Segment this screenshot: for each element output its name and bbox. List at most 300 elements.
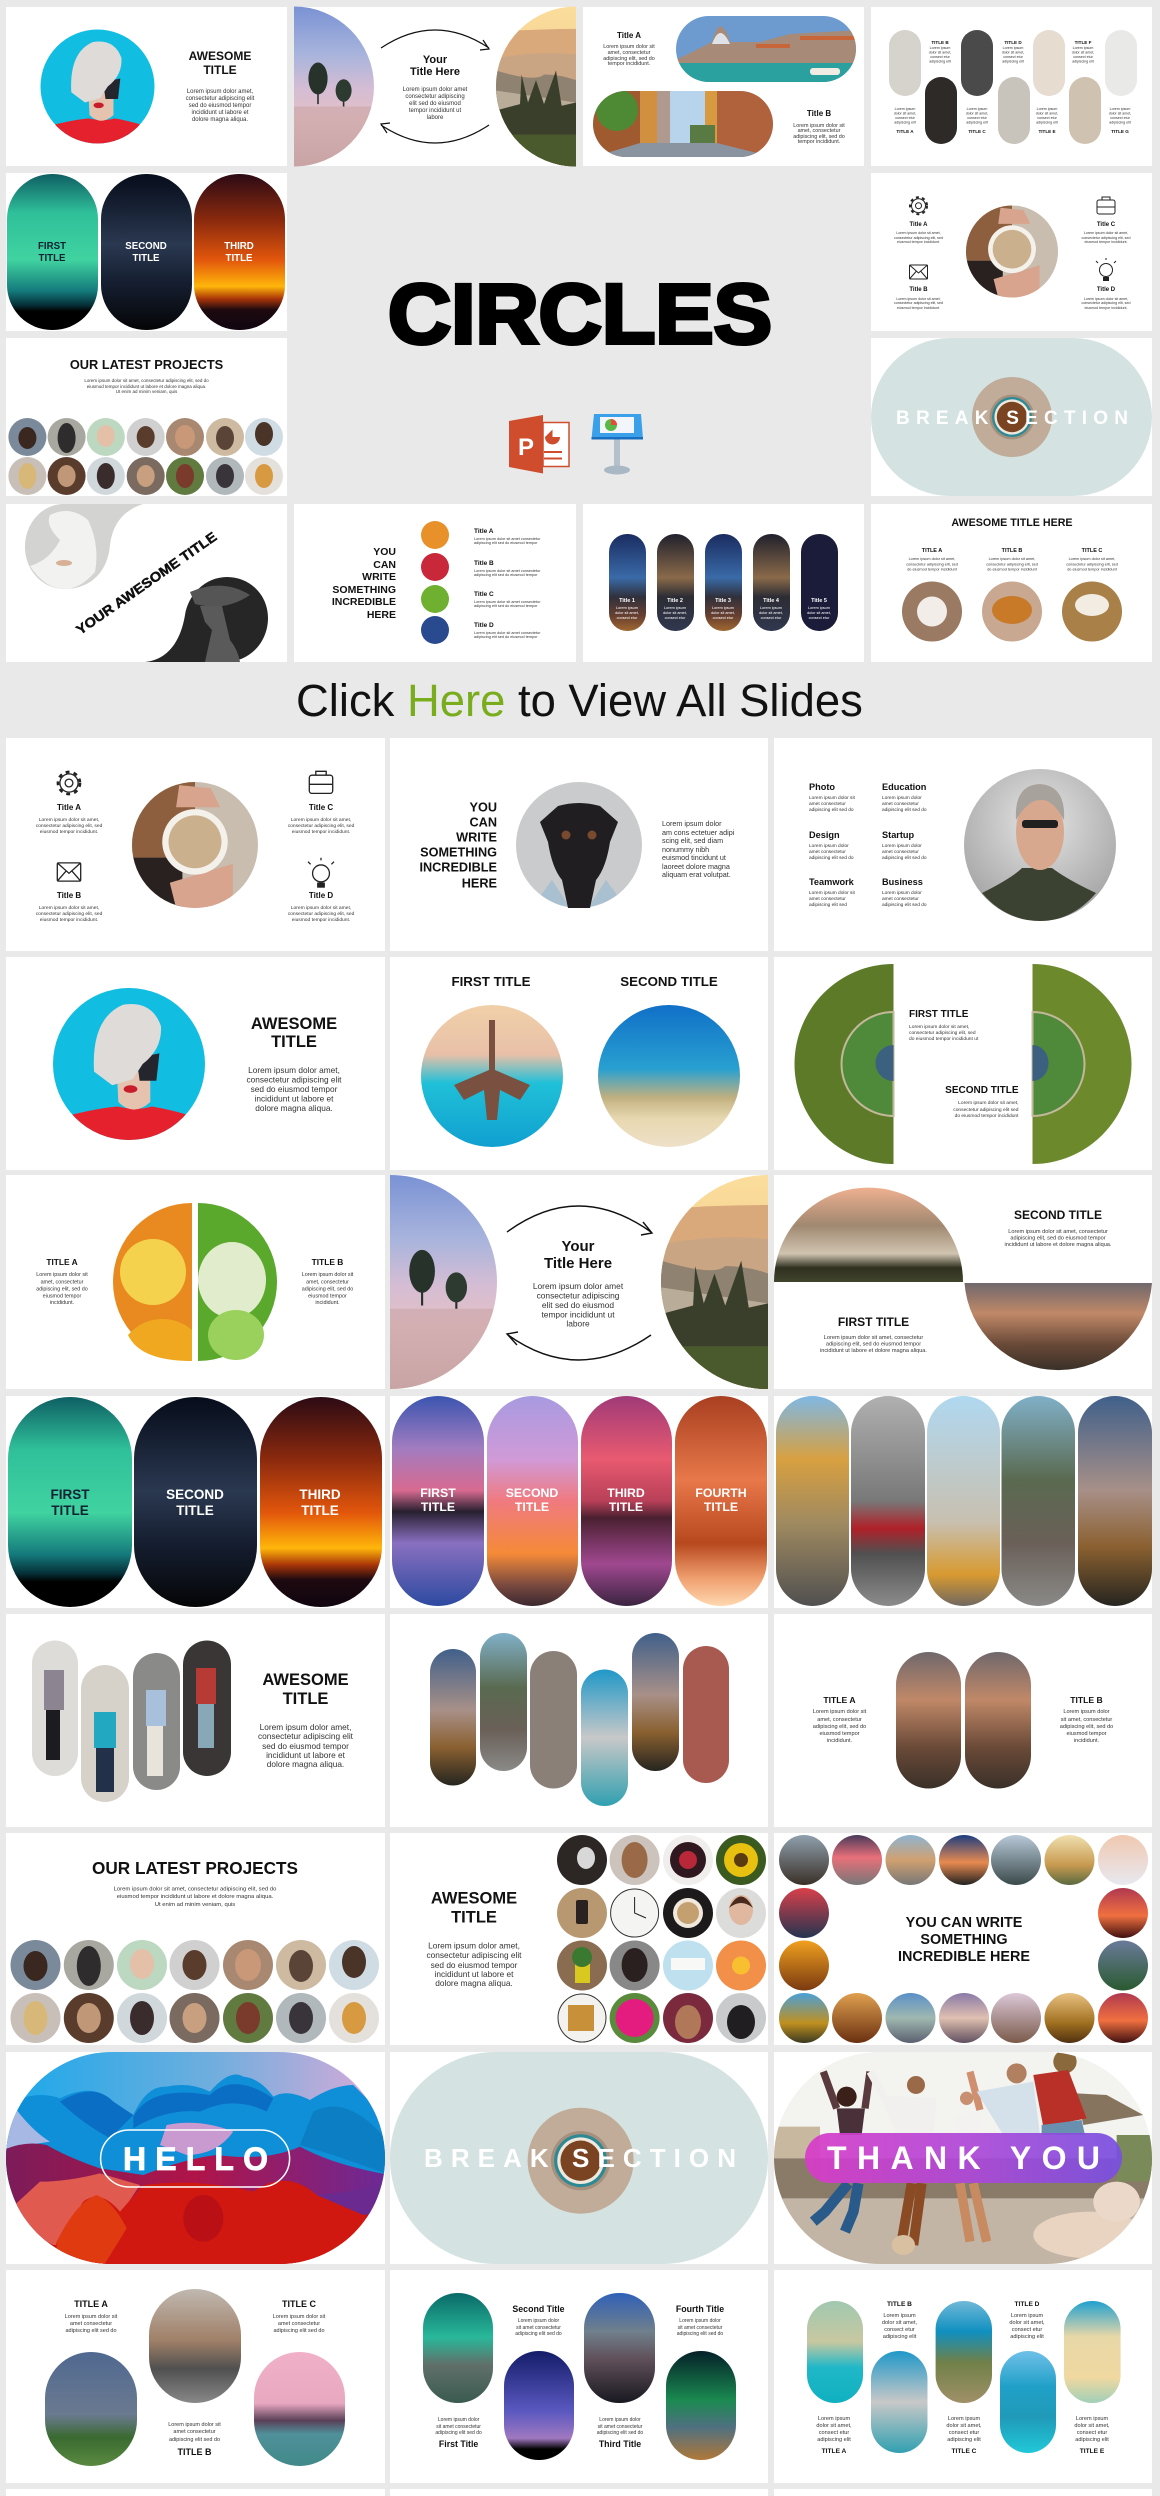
topic labels: Business: [882, 877, 923, 887]
text: fourth title: adipiscing elit sed do: [677, 2331, 723, 2337]
text: title a: amet, consectetur: [608, 50, 651, 56]
text: title b: incididunt.: [1074, 1738, 1100, 1744]
text: title a: adipiscing elit, sed do: [813, 1724, 866, 1730]
text: title a: TITLE A: [46, 1257, 78, 1267]
team portraits: [10, 1940, 379, 2043]
pill descriptions: Lorem ipsum: [760, 606, 782, 610]
icon: keynote: [592, 414, 643, 474]
text: fourth title: Fourth Title: [676, 2304, 724, 2314]
labels: adipiscing elit: [894, 120, 916, 124]
slide: five city pills: [774, 1396, 1152, 1608]
feature descriptions: Lorem ipsum dolor sit amet,: [291, 905, 351, 911]
body text: laoreet dolore magna: [662, 862, 730, 871]
photo: beach from above: [598, 1005, 740, 1147]
text: lower labels: dolor sit amet,: [1074, 2423, 1110, 2429]
photo: aurora lake: [423, 2293, 493, 2403]
slide: two landscape pills: [774, 1614, 1152, 1827]
text: title a: TITLE A: [823, 1695, 856, 1705]
labels: consect etur: [1037, 116, 1058, 120]
column labels: TITLE C: [1082, 548, 1102, 554]
body text: Lorem ipsum dolor sit amet, consectetur adipiscing elit, sed do: [84, 378, 209, 383]
pill labels: Title 1: [619, 598, 635, 604]
body text: consectetur adipiscing elit: [258, 1731, 354, 1741]
feature descriptions: Lorem ipsum dolor sit amet,: [1084, 297, 1128, 301]
pill descriptions: Lorem ipsum: [712, 606, 734, 610]
body text: Lorem ipsum dolor amet: [533, 1281, 624, 1291]
text: upper labels: consect etur: [1012, 2327, 1042, 2333]
feature descriptions: consectetur adipiscing elit, sed: [894, 301, 943, 305]
pill labels: THIRD: [607, 1486, 645, 1500]
heading: SOMETHING: [420, 846, 497, 860]
feature descriptions: Lorem ipsum dolor sit amet,: [896, 297, 941, 301]
feature descriptions: Lorem ipsum dolor sit amet,: [896, 231, 941, 235]
slide: four tall ovals: [390, 2270, 768, 2483]
text: title b: adipiscing elit sed do: [169, 2437, 220, 2443]
column descriptions: consectetur adipiscing elit, sed: [1066, 562, 1118, 566]
photo: road: [149, 2289, 241, 2403]
labels: dolor sit amet,: [929, 50, 951, 54]
gradient mountain pill: [0, 2052, 390, 2272]
text: title a: incididunt.: [827, 1738, 853, 1744]
list descriptions: adipiscing elit sed do eiusmod tempor: [474, 635, 538, 639]
feature descriptions: eiusmod tempor incididunt.: [1085, 306, 1127, 310]
pill: canyon: [675, 1396, 767, 1606]
labels: TITLE A: [896, 129, 914, 134]
text: second title: adipiscing elit sed do: [515, 2331, 562, 2337]
photo: coffee saucer: [528, 2108, 634, 2214]
topic descriptions: adipiscing elit sed do: [809, 807, 854, 813]
text: second title: Lorem ipsum dolor sit amet,: [958, 1100, 1018, 1106]
slide: two half circles with arrows large: [390, 1175, 768, 1389]
photo: island: [936, 2301, 992, 2403]
topic descriptions: Lorem ipsum dolor: [882, 843, 922, 849]
photo: lilac field: [390, 1175, 497, 1389]
list descriptions: Lorem ipsum dolor sit amet consectetur: [474, 631, 541, 635]
photo: woman with white hair: [53, 988, 205, 1140]
text: first title: adipiscing elit sed do: [435, 2430, 482, 2436]
topic descriptions: Lorem ipsum dolor: [809, 843, 849, 849]
slide: four feature icons: [871, 173, 1152, 331]
slide: latest projects: [6, 338, 287, 496]
slide: split fruit circle: [6, 1175, 385, 1389]
labels: Lorem ipsum: [967, 107, 987, 111]
icon: briefcase: [1097, 197, 1115, 214]
body text: scing elit, sed diam: [662, 836, 723, 845]
heading: AWESOME: [251, 1015, 337, 1033]
text: lower labels: Lorem ipsum: [818, 2416, 850, 2422]
labels: Lorem ipsum: [1073, 46, 1093, 50]
text: title b: sit amet, consectetur: [1061, 1717, 1112, 1723]
list labels: Title C: [474, 591, 494, 598]
body text: Ut enim ad minim veniam, quis: [155, 1902, 235, 1908]
headings: FIRST TITLE: [451, 974, 531, 989]
text: title a: TITLE A: [74, 2299, 108, 2309]
heading: Your: [423, 54, 448, 66]
pill labels: TITLE: [515, 1500, 549, 1514]
feature labels: Title D: [309, 891, 333, 900]
body text: consectetur adipiscing: [405, 94, 465, 100]
topic descriptions: amet consectetur: [809, 849, 846, 855]
icon: light bulb: [308, 858, 334, 888]
body text: eiusmod tempor incididunt ut labore et dolore magna aliqua.: [117, 1894, 274, 1900]
icon: powerpoint: [509, 415, 569, 474]
arrows: [507, 1206, 652, 1360]
pill: laundry alley: [1002, 1396, 1075, 1606]
photo grid: [557, 1835, 766, 2043]
slide: four people pills: [6, 1614, 385, 1827]
feature descriptions: eiusmod tempor incididunt.: [40, 829, 98, 835]
text: title a: adipiscing elit sed do: [65, 2328, 117, 2334]
slide: seven small pills: [871, 7, 1152, 166]
column descriptions: do eiusmod tempor incididunt: [907, 568, 958, 572]
body text: Lorem ipsum dolor amet,: [428, 1940, 520, 1950]
text: title a: Lorem ipsum dolor sit: [603, 44, 655, 50]
text: title a: tempor incididunt.: [608, 61, 650, 67]
feature descriptions: eiusmod tempor incididunt.: [292, 917, 350, 923]
pill descriptions: Lorem ipsum: [664, 606, 686, 610]
labels: adipiscing elit: [1109, 120, 1131, 124]
text: title c: amet consectetur: [278, 2321, 320, 2327]
pill labels: THIRD: [224, 241, 254, 252]
pill: stairs: [530, 1651, 577, 1788]
text: title a: adipiscing elit, sed do: [36, 1286, 88, 1292]
topic descriptions: Lorem ipsum dolor: [882, 795, 922, 801]
pill descriptions: consect etur: [761, 616, 782, 620]
labels: consect etur: [930, 55, 951, 59]
pill: mountain: [965, 1652, 1031, 1788]
body text: Ut enim ad minim veniam, quis: [116, 389, 178, 394]
pill: night sky: [101, 174, 192, 330]
pill labels: SECOND: [166, 1487, 224, 1502]
labels: TITLE C: [968, 129, 986, 134]
photo: woman in water: [871, 2351, 928, 2453]
pill: cathedral: [632, 1633, 679, 1771]
photo: misty hills: [496, 6, 576, 166]
body text: sed do eiusmod tempor: [189, 103, 251, 109]
text: title a: Title A: [617, 31, 641, 40]
text: lower labels: adipiscing elit: [1075, 2437, 1109, 2443]
text: title a: incididunt.: [50, 1300, 74, 1306]
body text: Lorem ipsum dolor amet: [403, 87, 468, 93]
labels: consect etur: [1110, 116, 1131, 120]
text: lower labels: TITLE E: [1080, 2448, 1105, 2455]
list descriptions: Lorem ipsum dolor sit amet consectetur: [474, 600, 541, 604]
column labels: TITLE B: [1002, 548, 1022, 554]
topic descriptions: amet consectetur: [882, 896, 919, 902]
text: title c: Lorem ipsum dolor sit: [273, 2314, 326, 2320]
slide: awesome title large: [6, 957, 385, 1170]
text: title a: eiusmod tempor: [819, 1731, 860, 1737]
photo: coffee cup: [966, 206, 1058, 298]
pill descriptions: consect etur: [665, 616, 686, 620]
photo: left half park: [794, 964, 894, 1164]
feature labels: Title D: [1097, 287, 1116, 293]
heading: SOMETHING: [332, 584, 396, 596]
slide: four sunset pills: [390, 1396, 768, 1608]
pill labels: THIRD: [299, 1487, 341, 1502]
text: title b: amet, consectetur: [798, 128, 841, 134]
heading: TITLE: [271, 1033, 317, 1051]
pill descriptions: dolor sit amet,: [759, 611, 783, 615]
heading: INCREDIBLE: [332, 596, 396, 608]
body text: consectetur adipiscing elit: [426, 1950, 522, 1960]
photo: pug dog: [516, 782, 642, 908]
diagonal title: YOUR AWESOME TITLE: [73, 529, 220, 638]
photo: water villas: [421, 1005, 563, 1147]
feature descriptions: consectetur adipiscing elit, sed: [288, 823, 355, 829]
pier detail: [454, 1020, 530, 1120]
pill labels: SECOND: [125, 241, 167, 252]
labels: adipiscing elit: [1072, 60, 1094, 64]
pill labels: TITLE: [176, 1503, 214, 1518]
heading: Your: [561, 1238, 595, 1255]
body text: incididunt ut labore et: [435, 1969, 514, 1979]
slide: thank you: [770, 2050, 1160, 2268]
feature labels: Title B: [57, 891, 81, 900]
topic descriptions: adipiscing elit sed: [809, 902, 847, 908]
list descriptions: adipiscing elit sed do eiusmod tempor: [474, 541, 538, 545]
body text: Lorem ipsum dolor amet,: [260, 1722, 351, 1732]
body text: Lorem ipsum dolor amet,: [248, 1065, 340, 1075]
body text: incididunt ut labore et: [266, 1750, 346, 1760]
feature descriptions: eiusmod tempor incididunt.: [292, 829, 350, 835]
pill: pool: [581, 1670, 628, 1806]
text: lower labels: consect etur: [949, 2430, 979, 2436]
body text: incididunt ut labore et: [191, 110, 249, 116]
icon: powerpoint: P: [518, 434, 534, 461]
photo: smiling man: [964, 769, 1116, 921]
photo: coffee saucer: [972, 377, 1052, 457]
text: first title: consectetur adipiscing elit, sed: [909, 1030, 976, 1036]
pill: dusk street: [430, 1649, 476, 1786]
heading: TITLE: [451, 1908, 497, 1926]
labels: TITLE B: [931, 40, 949, 45]
text: upper labels: dolor sit amet,: [882, 2320, 918, 2326]
pill descriptions: Lorem ipsum: [808, 606, 830, 610]
labels: consect etur: [1003, 55, 1024, 59]
text: lower labels: consect etur: [1077, 2430, 1107, 2436]
body text: Lorem ipsum dolor amet,: [187, 89, 254, 95]
text: second title: consectetur adipiscing elit sed: [953, 1107, 1019, 1113]
text: title b: TITLE B: [1070, 1695, 1103, 1705]
text: second title: SECOND TITLE: [1014, 1208, 1102, 1222]
column descriptions: Lorem ipsum dolor sit amet,: [989, 557, 1035, 561]
text: upper labels: adipiscing elit: [1010, 2334, 1044, 2340]
pill: flatiron: [927, 1396, 1000, 1606]
pill: red house: [683, 1646, 729, 1783]
labels: dolor sit amet,: [894, 112, 916, 116]
cropped next row of slides: [6, 2489, 1152, 2496]
text: lower labels: consect etur: [819, 2430, 849, 2436]
text: title c: TITLE C: [282, 2299, 316, 2309]
labels: TITLE G: [1111, 129, 1129, 134]
thank you label: THANK YOU: [827, 2140, 1100, 2176]
pill: hill town: [896, 1652, 961, 1788]
feature descriptions: consectetur adipiscing elit, sed: [1082, 236, 1130, 240]
body text: labore: [427, 115, 444, 121]
heading: AWESOME TITLE HERE: [951, 517, 1073, 529]
text: title b: eiusmod tempor: [308, 1294, 347, 1300]
text: title a: Lorem ipsum dolor sit: [65, 2314, 118, 2320]
teal pill background: [871, 338, 1152, 496]
text: lower labels: Lorem ipsum: [948, 2416, 980, 2422]
labels: [894, 40, 1131, 134]
labels: Lorem ipsum: [1110, 107, 1130, 111]
pond: [876, 1045, 1048, 1081]
topic descriptions: adipiscing elit sed do: [809, 855, 854, 861]
body text: consectetur adipiscing elit: [246, 1074, 342, 1084]
topic descriptions: amet consectetur: [882, 849, 919, 855]
team portraits: [8, 418, 283, 495]
labels: consect etur: [967, 116, 988, 120]
column descriptions: Lorem ipsum dolor sit amet,: [909, 557, 955, 561]
pill labels: Title 3: [715, 598, 731, 604]
list labels: Title D: [474, 622, 494, 629]
body text: labore: [566, 1318, 590, 1328]
labels: adipiscing elit: [929, 60, 951, 64]
list descriptions: Lorem ipsum dolor sit amet consectetur: [474, 537, 541, 541]
column labels: TITLE A: [922, 548, 942, 554]
text: title b: adipiscing elit, sed do: [1060, 1724, 1113, 1730]
slide: your awesome title diagonal: [6, 504, 287, 662]
heading: AWESOME: [431, 1890, 517, 1908]
text: title b: eiusmod tempor: [1066, 1731, 1107, 1737]
text: title b: Title B: [807, 109, 831, 118]
body text: tempor incididunt ut: [409, 108, 462, 114]
text: title a: amet consectetur: [70, 2321, 112, 2327]
hello frame: [101, 2130, 290, 2187]
pill descriptions: consect etur: [617, 616, 638, 620]
feature descriptions: Lorem ipsum dolor sit amet,: [1084, 231, 1128, 235]
heading: Title Here: [544, 1255, 612, 1272]
slide: two pill photos: [583, 7, 864, 166]
topic descriptions: adipiscing elit sed do: [882, 902, 927, 908]
labels: Lorem ipsum: [1037, 107, 1057, 111]
text: upper labels: Lorem ipsum: [1011, 2313, 1043, 2319]
people pills: [32, 1640, 231, 1802]
text: title a: amet, consectetur: [41, 1280, 84, 1286]
body text: aliquam erat volutpat.: [662, 870, 731, 879]
pill descriptions: dolor sit amet,: [663, 611, 687, 615]
text: title b: Lorem ipsum dolor sit: [793, 123, 845, 129]
body text: dolore magna aliqua.: [435, 1978, 513, 1988]
feature descriptions: consectetur adipiscing elit, sed: [894, 236, 943, 240]
text: upper labels: Lorem ipsum: [883, 2313, 916, 2319]
text: second title: sit amet consectetur: [516, 2325, 561, 2331]
photo: boats: [1000, 2351, 1056, 2453]
gray swirl with white hair: [25, 504, 143, 589]
pill: aurora: [7, 174, 98, 330]
heading: CAN: [373, 559, 396, 571]
pill: old town: [776, 1396, 849, 1606]
pill labels: TITLE: [609, 1500, 643, 1514]
column descriptions: Lorem ipsum dolor sit amet,: [1069, 557, 1115, 561]
text: title b: Lorem ipsum dolor sit: [168, 2422, 221, 2428]
feature descriptions: consectetur adipiscing elit, sed: [36, 911, 103, 917]
beach photo pill: [770, 2050, 1160, 2268]
body text: consectetur adipiscing elit: [186, 96, 255, 102]
text: third title: Lorem ipsum dolor: [599, 2417, 641, 2423]
topic descriptions: Lorem ipsum dolor sit: [809, 890, 856, 896]
text: lower labels: Lorem ipsum: [1076, 2416, 1108, 2422]
topic labels: Teamwork: [809, 877, 855, 887]
pill labels: TITLE: [421, 1500, 455, 1514]
feature descriptions: Lorem ipsum dolor sit amet,: [39, 905, 99, 911]
text: second title: Second Title: [512, 2304, 565, 2314]
call to action: Click Here to View All Slides: [296, 675, 863, 726]
pill labels: TITLE: [39, 253, 66, 264]
photo: sandy beach: [1064, 2301, 1121, 2403]
arrows: [381, 30, 489, 143]
feature labels: Title A: [909, 222, 928, 228]
slide: six staggered pills: [390, 1614, 768, 1827]
pill: dusk street: [1078, 1396, 1152, 1606]
text: title b: amet, consectetur: [306, 1280, 349, 1286]
dark swirl with hat: [145, 577, 268, 662]
feature descriptions: consectetur adipiscing elit, sed: [288, 911, 355, 917]
pill descriptions: Lorem ipsum: [616, 606, 638, 610]
text: title b: adipiscing elit, sed do: [793, 134, 845, 140]
heading: YOU: [470, 800, 497, 814]
slide: latest projects large: [6, 1833, 385, 2045]
pill labels: TITLE: [704, 1500, 738, 1514]
pill descriptions: dolor sit amet,: [711, 611, 735, 615]
inner lawn: [842, 1012, 1084, 1116]
heading: Title Here: [410, 66, 460, 78]
food photos: [902, 582, 1122, 642]
feature descriptions: Lorem ipsum dolor sit amet,: [291, 817, 351, 823]
slide: circle photo grid: [390, 1833, 768, 2045]
photo: coffee cup: [132, 782, 258, 908]
pill labels: FIRST: [38, 241, 66, 252]
slide: pug portrait: [390, 738, 768, 951]
labels: consect etur: [1073, 55, 1094, 59]
teal pill background: [390, 2052, 768, 2264]
labels: adipiscing elit: [966, 120, 988, 124]
labels: Lorem ipsum: [895, 107, 915, 111]
topic descriptions: amet consectetur: [809, 896, 846, 902]
photo: windmill: [45, 2352, 137, 2466]
topic descriptions: adipiscing elit sed do: [882, 807, 927, 813]
feature descriptions: Lorem ipsum dolor sit amet,: [39, 817, 99, 823]
heading: OUR LATEST PROJECTS: [70, 357, 224, 372]
body text: am cons ectetuer adipi: [662, 828, 735, 837]
text: title b: incididunt.: [315, 1300, 340, 1306]
text: title a: Lorem ipsum dolor sit: [813, 1709, 867, 1715]
text: second title: Lorem ipsum dolor sit amet, consectetur: [1008, 1229, 1108, 1235]
text: title b: Lorem ipsum dolor sit: [302, 1272, 354, 1278]
text: lower labels: adipiscing elit: [817, 2437, 851, 2443]
centered heading: INCREDIBLE HERE: [898, 1949, 1030, 1965]
photo: resort: [807, 2301, 863, 2403]
slide: landscape circle frame: [774, 1833, 1152, 2045]
pill: night sky: [134, 1397, 257, 1607]
body text: Lorem ipsum dolor: [662, 819, 722, 828]
text: lower labels: dolor sit amet,: [946, 2423, 982, 2429]
topic labels: Photo: [809, 782, 835, 792]
slide: top and bottom semicircles: [774, 1175, 1152, 1389]
text: third title: adipiscing elit sed do: [597, 2430, 643, 2436]
labels: TITLE E: [1038, 129, 1056, 134]
feature descriptions: eiusmod tempor incididunt.: [1085, 240, 1127, 244]
text: first title: sit amet consectetur: [436, 2424, 481, 2430]
circle frame photos: [779, 1835, 1148, 2043]
centered heading: YOU CAN WRITE: [906, 1915, 1023, 1931]
slide: break section large: [390, 2052, 768, 2264]
labels: Lorem ipsum: [930, 46, 950, 50]
labels: adipiscing elit: [1002, 60, 1024, 64]
body text: dolore magna aliqua.: [267, 1759, 344, 1769]
